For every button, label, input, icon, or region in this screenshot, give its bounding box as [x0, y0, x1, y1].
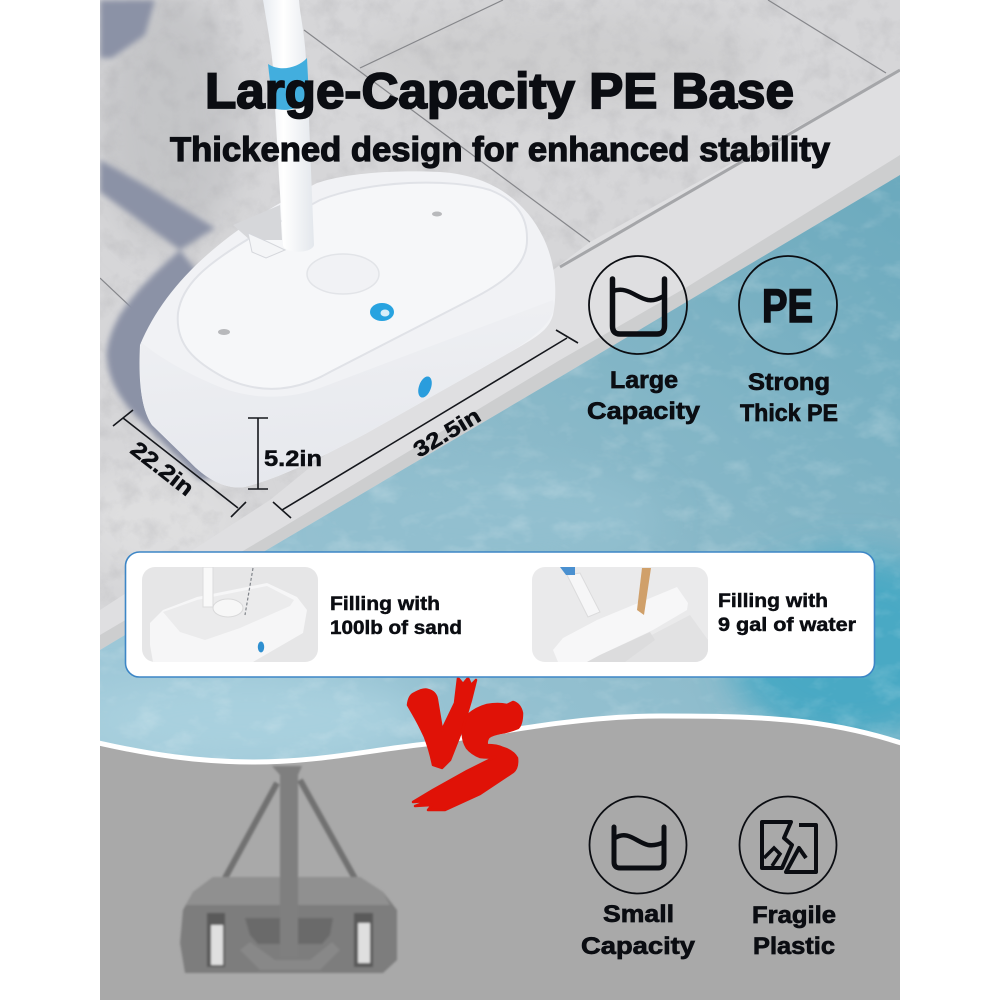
base lower side shading: [140, 300, 554, 487]
base body: [140, 171, 555, 487]
feature: small capacity: [581, 796, 696, 960]
label: Large: [610, 367, 678, 394]
base body: [180, 877, 397, 973]
product: white PE base with pole: [140, 0, 555, 487]
dimension: width 22.2in: [113, 410, 246, 517]
logo circle on lid: [307, 254, 379, 294]
cast shadows of pole and base: [100, 0, 216, 483]
inner lid outline: [178, 183, 527, 389]
label: Small: [603, 901, 674, 928]
pavement background: [100, 0, 900, 610]
icon: cracked panel: [740, 796, 836, 894]
label: 100lb of sand: Filling with: [330, 593, 440, 615]
label: Strong: [748, 369, 830, 396]
title: Large-Capacity PE Base: [205, 63, 794, 119]
label: Capacity: [587, 398, 701, 425]
panel card: [126, 552, 874, 677]
thumbnail: filling with water: [532, 567, 708, 662]
mount recess: [233, 205, 282, 240]
letter S: [413, 702, 522, 810]
base top: [186, 877, 390, 905]
feature: fragile plastic: [740, 796, 836, 960]
label: [587, 367, 701, 425]
blue top plug: [370, 303, 394, 321]
dimension: height 5.2in: 5.2in: [264, 446, 322, 471]
coping shadow strip: [100, 155, 900, 650]
icon: container with water: [589, 256, 687, 354]
dimension: length 32.5in: 32.5in: [409, 403, 485, 462]
label: 9 gal of water: 9 gal of water: [718, 614, 856, 636]
icon: PE badge: PE: [762, 279, 813, 332]
lower bracket: [240, 942, 340, 970]
blue side plug: [416, 375, 434, 399]
label: [581, 901, 696, 960]
panel: filling options: [126, 552, 874, 677]
subtitle: Thickened design for enhanced stability: [170, 131, 830, 169]
label: 9 gal of water: Filling with: [718, 590, 828, 612]
struts: [213, 780, 367, 900]
photo scene: pool deck and water: [100, 0, 900, 760]
blue collar: [268, 58, 309, 110]
pole: [272, 766, 302, 957]
feature: strong thick PE: [739, 256, 838, 427]
thumbnail: filling with sand: [142, 567, 318, 662]
icon: PE badge: [739, 256, 837, 354]
pool water: [100, 175, 900, 760]
label: Thick PE: [740, 400, 838, 427]
label: [752, 902, 836, 960]
label: Capacity: [581, 933, 696, 960]
pool coping band: [100, 70, 900, 650]
pavement seams: [100, 0, 900, 330]
label: 100lb of sand: 100lb of sand: [330, 617, 462, 639]
pole: [263, 0, 314, 252]
label: Plastic: [753, 933, 835, 960]
lid holes: [218, 212, 442, 335]
feature: large capacity: [587, 256, 701, 425]
ribbed centre recess: [245, 918, 333, 944]
dimension: width 22.2in: 22.2in: [126, 436, 199, 501]
label: [740, 369, 838, 427]
grey competitor panel with wave edge: [90, 716, 910, 1000]
letter V: [408, 678, 476, 768]
right wheel: [354, 913, 373, 967]
VS emblem: [408, 678, 522, 810]
icon: small container: [590, 796, 686, 894]
dimension: length 32.5in: [273, 330, 578, 518]
label: 9 gal of water: [718, 590, 856, 636]
label: 100lb of sand: [330, 593, 462, 639]
left wheel: [207, 913, 225, 967]
competitor: grey plastic base with pole: [180, 766, 397, 973]
label: Fragile: [752, 902, 836, 929]
dimension: height 5.2in: [248, 418, 322, 489]
